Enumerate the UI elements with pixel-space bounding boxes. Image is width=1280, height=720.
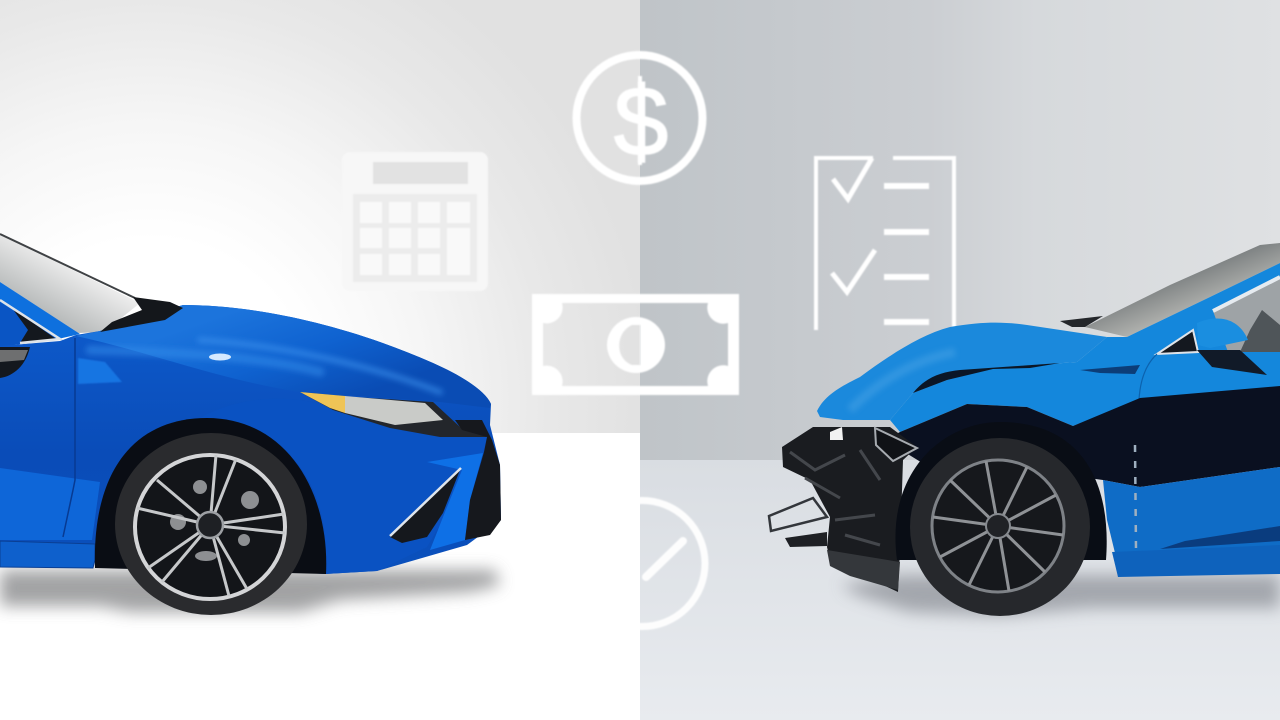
hood — [817, 323, 1107, 420]
rocker — [0, 541, 95, 568]
lower door band — [0, 468, 100, 540]
mirror trim triangle — [1157, 330, 1198, 354]
fog panel — [427, 453, 483, 550]
panel: left background — [0, 0, 640, 720]
side window — [1213, 277, 1280, 352]
icon: dollar coin — [576, 55, 702, 181]
icon: dollar coin: $ — [614, 66, 668, 176]
lower stripe — [1160, 526, 1280, 549]
hood — [76, 305, 491, 408]
side mirror — [0, 347, 30, 378]
cowl — [100, 297, 183, 332]
broken headlight — [875, 428, 917, 461]
upper door highlight — [78, 358, 122, 384]
mirror — [1197, 319, 1248, 348]
hood highlights — [90, 340, 440, 392]
front wheel — [910, 438, 1090, 616]
fender — [200, 399, 487, 574]
grille — [455, 420, 501, 540]
exposed front structure — [782, 427, 917, 592]
side window — [0, 302, 58, 347]
highlight spot — [209, 354, 231, 360]
black primer panel — [885, 386, 1280, 487]
panel: right background — [640, 0, 1280, 720]
windshield — [1085, 243, 1280, 337]
damaged seam — [1135, 445, 1136, 550]
rocker — [1112, 545, 1280, 577]
dark slit — [1080, 365, 1140, 374]
a-pillar — [0, 282, 80, 339]
broken bar — [785, 532, 827, 547]
hood crease — [913, 363, 1060, 393]
window trim — [1213, 277, 1280, 311]
icon: check circle — [579, 500, 705, 626]
ground shadow — [0, 570, 500, 612]
body side — [0, 305, 501, 574]
windshield — [0, 234, 140, 333]
cowl — [1060, 316, 1103, 327]
white fragment — [830, 427, 843, 440]
wheel arch — [895, 422, 1107, 560]
windshield top edge — [0, 234, 135, 298]
wheel arch — [95, 418, 326, 574]
illustration: damaged blue car — [769, 243, 1280, 616]
door seam — [63, 338, 75, 537]
engine details — [790, 450, 880, 545]
door seam — [1139, 354, 1157, 400]
hood scratches — [850, 352, 955, 410]
lower vent — [390, 470, 460, 543]
icon: banknote — [532, 294, 739, 395]
lower splash guard — [827, 550, 900, 590]
icon: calculator — [342, 152, 488, 291]
front wheel — [115, 433, 307, 615]
lower door — [1103, 467, 1280, 553]
illustration: intact blue car — [0, 234, 501, 615]
trim — [0, 300, 60, 343]
ground shadow — [840, 575, 1280, 616]
broken bumper bracket — [769, 498, 827, 531]
icon: checklist — [816, 158, 954, 330]
body upper — [890, 263, 1280, 432]
headlight — [300, 392, 487, 437]
